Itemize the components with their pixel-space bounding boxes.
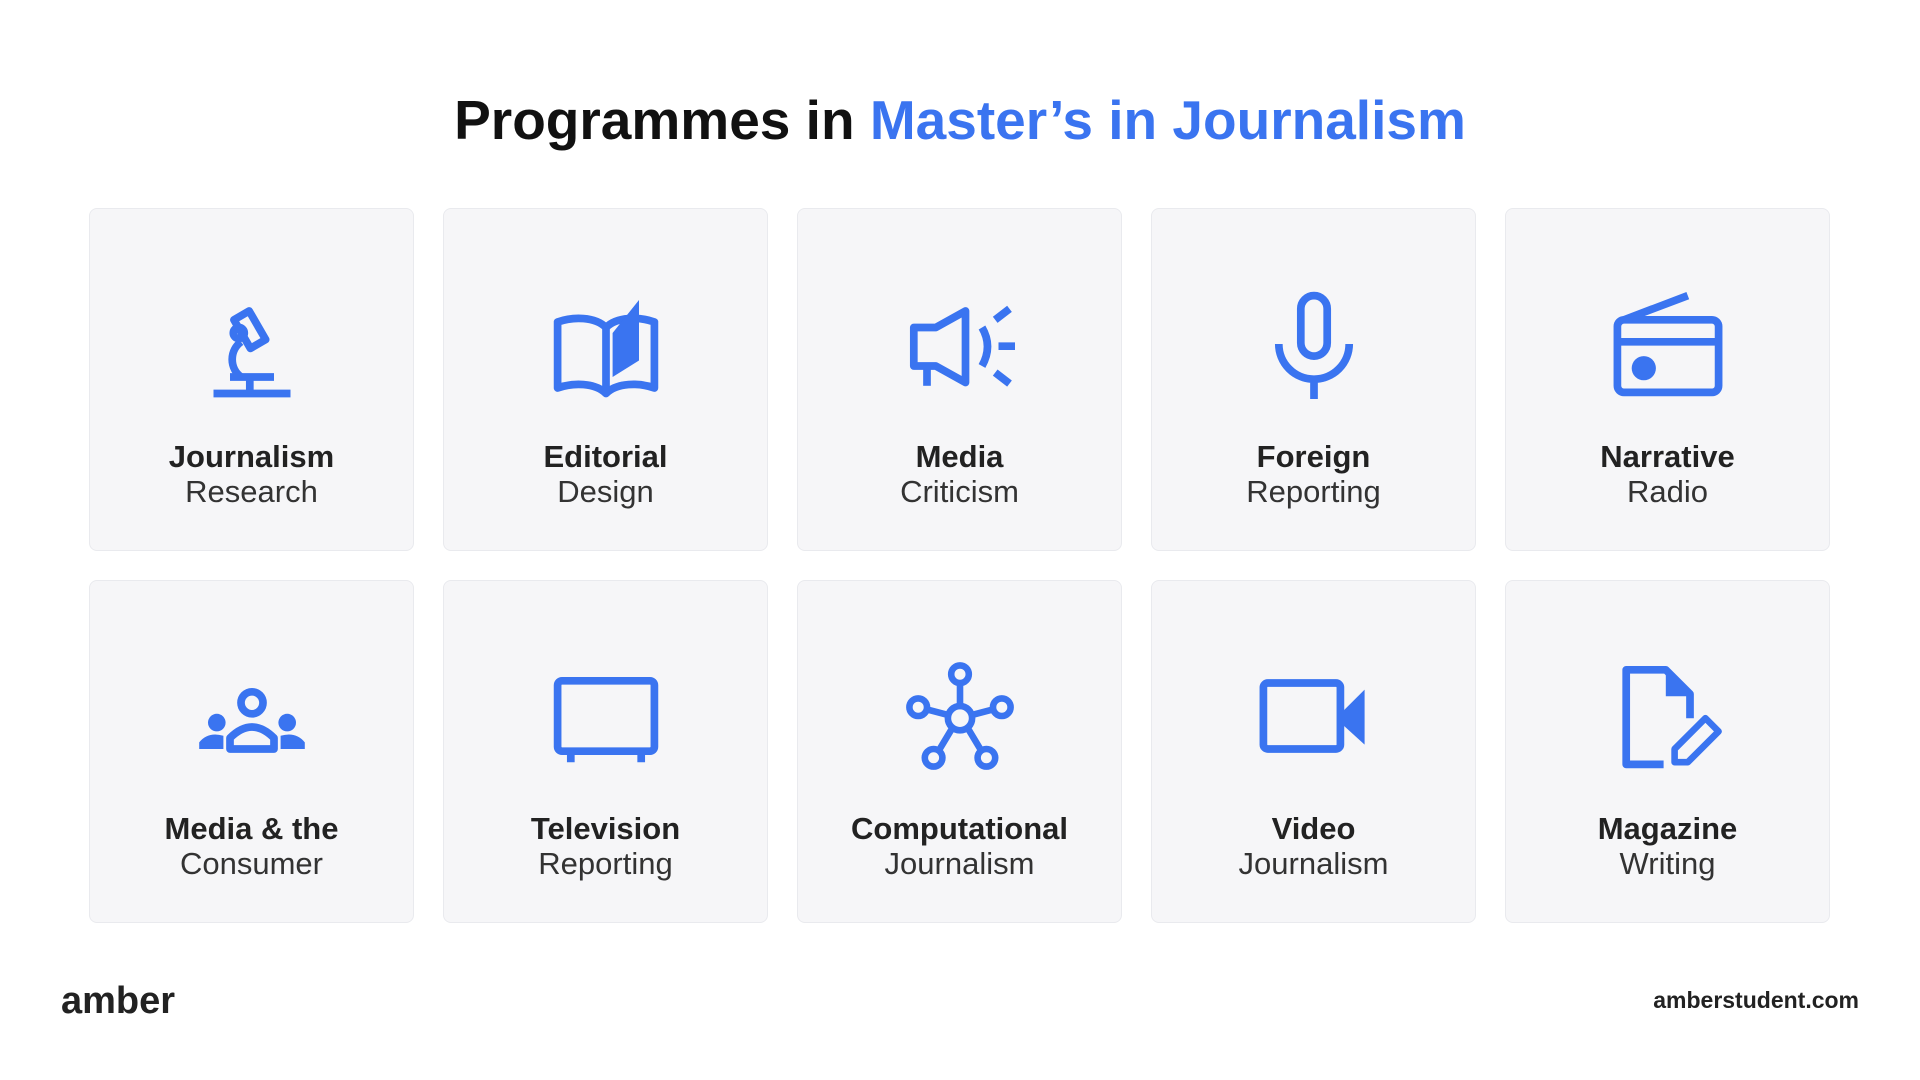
card: Video Journalism: Journalism	[1239, 846, 1388, 881]
card: Computational Journalism: Computational	[851, 811, 1068, 846]
card: Computational Journalism: Journalism	[885, 846, 1034, 881]
card: Media Criticism: Criticism	[900, 474, 1019, 509]
card: Video Journalism	[1151, 580, 1476, 923]
card: Magazine Writing: Writing	[1620, 846, 1715, 881]
card: Magazine Writing: Magazine	[1598, 811, 1737, 846]
card: Narrative Radio: Narrative	[1600, 439, 1735, 474]
icon: microscope	[214, 307, 290, 398]
logo: amber: amber	[61, 980, 175, 1022]
card: Magazine Writing	[1505, 580, 1830, 923]
card: Journalism Research: Research	[185, 474, 318, 509]
card: Narrative Radio: Radio	[1627, 474, 1708, 509]
card: Media & the Consumer: Media & the	[165, 811, 338, 846]
card: Video Journalism: Video	[1272, 811, 1355, 846]
card: Editorial Design: Editorial	[543, 439, 668, 474]
icon: tv	[554, 677, 658, 762]
card: Foreign Reporting	[1151, 208, 1476, 551]
card: Editorial Design: Design	[557, 474, 654, 509]
card: Media Criticism	[797, 208, 1122, 551]
card: Media & the Consumer	[89, 580, 414, 923]
icon: document with pen	[1622, 666, 1722, 768]
card: Television Reporting	[443, 580, 768, 923]
card: Journalism Research	[89, 208, 414, 551]
icon: video camera	[1260, 679, 1365, 753]
footer url: amberstudent.com	[1653, 987, 1859, 1013]
card: Editorial Design	[443, 208, 768, 551]
card: Television Reporting: Television	[531, 811, 680, 846]
title: Programmes in Master’s in Journalism	[454, 89, 1466, 151]
icon: microphone	[1274, 292, 1354, 399]
card: Narrative Radio	[1505, 208, 1830, 551]
card: Foreign Reporting: Foreign	[1257, 439, 1370, 474]
card: Media Criticism: Media	[916, 439, 1003, 474]
card: Computational Journalism	[797, 580, 1122, 923]
icon: network	[906, 662, 1014, 770]
card: Foreign Reporting: Reporting	[1246, 474, 1381, 509]
card: Media & the Consumer: Consumer	[180, 846, 323, 881]
card: Journalism Research: Journalism	[169, 439, 334, 474]
icon: radio	[1614, 292, 1722, 396]
icon: megaphone	[910, 306, 1015, 387]
icon: group	[199, 688, 305, 753]
card: Television Reporting: Reporting	[538, 846, 673, 881]
icon: open book	[554, 300, 658, 398]
